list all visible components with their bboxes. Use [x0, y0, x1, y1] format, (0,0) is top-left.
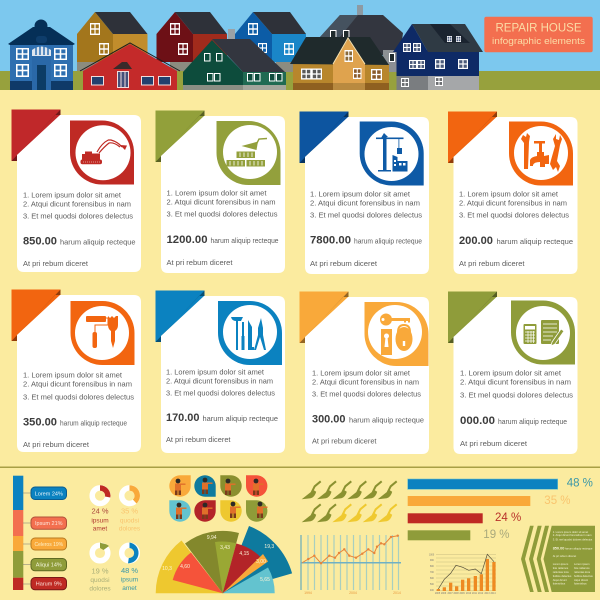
card 4: plumbing: 200.00 [459, 235, 493, 247]
chevron text panel: Atqui dicunt [574, 578, 588, 582]
icon: excavator [80, 140, 127, 164]
card 6: tools: 1. Lorem ipsum dolor sit amet [166, 367, 265, 376]
donut: 48%: ipsum [121, 576, 138, 584]
chevron text panel: fote ratlamos [553, 566, 569, 570]
chevron text panel: 3. Et mel quodsi dolores delectus [553, 538, 593, 542]
card 4: plumbing [448, 112, 578, 274]
donut: 19%: dolores [89, 586, 111, 593]
wedge: dark olive [185, 531, 239, 593]
donut: 24%: ipsum [91, 517, 109, 524]
icon: crane and building [376, 133, 408, 172]
wedge: blue [223, 526, 292, 593]
house: main blue [8, 20, 75, 90]
card 8: finance: harum aliquip recteque [498, 417, 567, 426]
card 6: tools: 3. Et mel quodsi dolores delectus [166, 388, 275, 397]
chevron text panel: fuditos delectus [553, 574, 572, 578]
bar: 48%: 48 % [567, 478, 593, 490]
card 1: excavation: harum aliquip recteque [60, 238, 136, 246]
subtitle: infographic elements [492, 36, 586, 46]
bar and line chart: 2005 [435, 593, 441, 595]
card 7: locks: At pri rebum diceret [312, 436, 377, 446]
rose chart: 3,00 [256, 559, 266, 565]
donut: 24%: 24 % [91, 507, 109, 516]
chevron text panel: Lorem ipsum [553, 562, 569, 566]
donut: 35%: quodsi [120, 517, 139, 524]
card 3: construction: harum aliquip recteque [354, 237, 422, 246]
card 5: painting: At pri rebum diceret [23, 440, 90, 449]
card 7: locks: 3. Et mel quodsi dolores delectus [312, 390, 421, 399]
wedge: yellow [156, 540, 223, 593]
bar and line chart: 2009 [460, 593, 465, 595]
line chart: 1994 [304, 591, 312, 595]
line chart: 2004 [349, 591, 357, 595]
card 5: painting: 2. Atqui dicunt forensibus in nam [23, 380, 132, 389]
card 3: construction: 1. Lorem ipsum dolor sit amet [310, 190, 411, 198]
donut: 48% [121, 542, 139, 592]
card 8: finance: 000.00 [460, 415, 495, 427]
donut: 48%: 48 % [121, 566, 138, 575]
rose chart: 4,15 [239, 551, 249, 557]
card 1: excavation: 1. Lorem ipsum dolor sit amet [23, 190, 122, 200]
card 2: masonry: 1200.00 [166, 234, 208, 246]
card 6: tools: 2. Atqui dicunt forensibus in nam [166, 376, 273, 385]
card 6: tools: harum aliquip recteque [202, 414, 278, 423]
card 3: construction: 2. Atqui dicunt forensibus in nam [310, 198, 420, 208]
card 7: locks: 2. Atqui dicunt forensibus in nam [312, 378, 419, 387]
sky [0, 0, 600, 71]
card 7: locks: 1. Lorem ipsum dolor sit amet [312, 369, 411, 378]
bar and line chart: 2010 [466, 593, 472, 595]
grass [0, 71, 600, 90]
rose chart [156, 526, 292, 593]
card 5: painting: 1. Lorem ipsum dolor sit amet [23, 371, 123, 380]
card 2: masonry: 3. Et mel quodsi dolores delectus [166, 210, 278, 218]
bar: 19% [408, 529, 510, 541]
bar and line chart: 700 [430, 572, 435, 574]
bar and line chart: 2008 [454, 593, 459, 595]
bar and line chart: 600 [430, 578, 435, 580]
label: Aliqui: Aliqui 14% [36, 563, 62, 569]
card 8: finance [448, 292, 578, 454]
title: REPAIR HOUSE [496, 22, 582, 34]
card 4: plumbing: 2. Atqui dicunt forensibus in nam [459, 198, 567, 208]
trowel pictogram [302, 481, 397, 522]
card 1: excavation: 3. Et mel quodsi dolores delectus [23, 212, 133, 220]
card 6: tools [156, 290, 285, 453]
bar and line chart: 2011 [472, 593, 478, 595]
icon: calculator and notebook [524, 320, 564, 346]
donut: 35% [119, 485, 141, 532]
card 4: plumbing: harum aliquip recteque [496, 237, 573, 246]
house: navy [393, 24, 483, 90]
rose chart: 5,65 [260, 577, 270, 583]
card 5: painting [12, 290, 141, 452]
chevron text panel: fotentribus [574, 582, 587, 586]
donut: 35%: dolores [119, 525, 141, 532]
house: tall grey back [320, 5, 403, 72]
house: ochre [77, 12, 148, 71]
icon: trowel and bricks [226, 138, 267, 166]
bar: 24% [408, 512, 521, 524]
bar and line chart: 2013 [484, 593, 490, 595]
donut: 19%: 19 % [91, 566, 109, 575]
house: bright blue [235, 12, 306, 72]
card 2: masonry: 1. Lorem ipsum dolor sit amet [166, 188, 267, 198]
card 3: construction: 3. Et mel quodsi dolores delectus [310, 210, 422, 220]
card 2: masonry: 2. Atqui dicunt forensibus in nam [166, 198, 276, 206]
card 3: construction: At pri rebum diceret [310, 259, 378, 268]
card 1: excavation: 2. Atqui dicunt forensibus in nam [23, 200, 131, 208]
card 3: construction: 7800.00 [310, 235, 351, 247]
bar: 35% [408, 495, 571, 507]
bar and line chart [429, 554, 496, 595]
bar and line chart: 900 [430, 560, 435, 562]
donut: 48%: amet [122, 585, 137, 592]
card 8: finance: 2. Atqui dicunt forensibus in nam [460, 378, 571, 387]
worker icons [169, 475, 268, 522]
card 6: tools: 170.00 [166, 412, 200, 424]
wedge: light teal [223, 568, 275, 593]
rose chart: 4,60 [180, 564, 190, 570]
chevron text panel: 1. Lorem ipsum dolor sit amet [553, 530, 588, 534]
house: dark red [156, 12, 227, 71]
rose chart: 3,43 [220, 545, 230, 551]
chevron text panel: 2. Atqui dicunt forensibus in nam [553, 533, 592, 537]
chevron text panel: Lorem ipsum [574, 562, 590, 566]
bar and line chart: 2014 [490, 593, 496, 595]
card 6: tools: At pri rebum diceret [166, 435, 231, 444]
card 2: masonry: harum aliquip recteque [210, 236, 278, 245]
rose chart: 9,94 [207, 535, 217, 541]
houses illustration [8, 5, 483, 90]
card 5: painting: 350.00 [23, 417, 57, 429]
bar and line chart: 2012 [478, 593, 484, 595]
bar: 35%: 35 % [544, 495, 571, 507]
card 4: plumbing: At pri rebum diceret [459, 259, 525, 268]
line chart: 2014 [393, 591, 401, 595]
card 2: masonry: At pri rebum diceret [166, 258, 233, 267]
donut: 24%: amet [93, 525, 107, 532]
icon: roller and brush [86, 316, 118, 348]
chevron text panel: Atqui dicunt [553, 578, 567, 582]
donut: 19%: quodsi [90, 577, 110, 584]
rose chart: 19,3 [264, 544, 274, 550]
card 4: plumbing: 3. Et mel quodsi dolores delectus [459, 210, 569, 220]
title box [484, 17, 593, 52]
wedge: coral [173, 552, 223, 593]
chevron text panel: ratiuntas loca [553, 570, 569, 574]
house: green [183, 29, 286, 90]
chevron text panel: fuditos delectus [574, 574, 593, 578]
donut: 35%: 35 % [121, 507, 138, 516]
card 4: plumbing: 1. Lorem ipsum dolor sit amet [459, 190, 559, 198]
rose chart: 10,3 [162, 566, 172, 572]
chevron text panel: At pri rebum diceret [553, 554, 576, 558]
label: Celeros: Celeros 19% [34, 542, 64, 548]
label: Harum: Harum 9% [36, 582, 62, 588]
card 1: excavation [12, 110, 141, 272]
card 8: finance: 3. Et mel quodsi dolores delectus [460, 390, 573, 399]
bar: 48% [408, 478, 593, 490]
card 1: excavation: At pri rebum diceret [23, 259, 89, 268]
card 5: painting: harum aliquip recteque [60, 419, 127, 428]
card 7: locks [300, 292, 429, 454]
card 7: locks: 300.00 [312, 413, 346, 425]
chevron text panel: ratiuntas loca [574, 570, 590, 574]
bar and line chart: 2007 [448, 593, 453, 595]
wedge: orange [223, 554, 268, 593]
card 1: excavation: 850.00 [23, 236, 57, 248]
card 5: painting: 3. Et mel quodsi dolores delectus [23, 392, 134, 401]
icon: hand tools [231, 317, 266, 350]
bar and line chart: 800 [430, 566, 435, 568]
wedge: dark red [223, 544, 261, 593]
chevron text panel: fote ratlamos [574, 566, 590, 570]
horizontal percentage bars [408, 478, 593, 541]
donut: 24% [91, 485, 110, 532]
bar and line chart: 400 [430, 590, 435, 592]
stacked bar with labels [13, 476, 66, 590]
line chart [300, 534, 401, 595]
icon: key and padlock [380, 314, 412, 355]
card 8: finance: At pri rebum diceret [460, 439, 528, 448]
card 3: construction [300, 112, 429, 274]
bar: 19%: 19 % [483, 529, 510, 541]
card 8: finance: 1. Lorem ipsum dolor sit amet [460, 369, 562, 378]
chevron text panel: 850.00 harum aliquip recteque [553, 546, 593, 550]
bar and line chart: 500 [430, 584, 435, 586]
bar and line chart: 2006 [441, 593, 447, 595]
label: Ipsum: Ipsum 21% [35, 521, 63, 527]
bar: 24%: 24 % [495, 512, 521, 524]
card 2: masonry [156, 110, 285, 273]
wedge: light olive [215, 542, 236, 593]
chevron text panel [521, 526, 595, 592]
icon: wrenches and faucet [521, 133, 562, 172]
card 7: locks: harum aliquip recteque [349, 415, 424, 424]
label: Lorem: Lorem 24% [35, 491, 63, 497]
chevron text panel: fotentribus [553, 582, 566, 586]
house: red [80, 43, 180, 90]
donut: 19% [89, 542, 111, 593]
bar and line chart: 1000 [429, 554, 435, 556]
house: yellow [290, 37, 389, 90]
